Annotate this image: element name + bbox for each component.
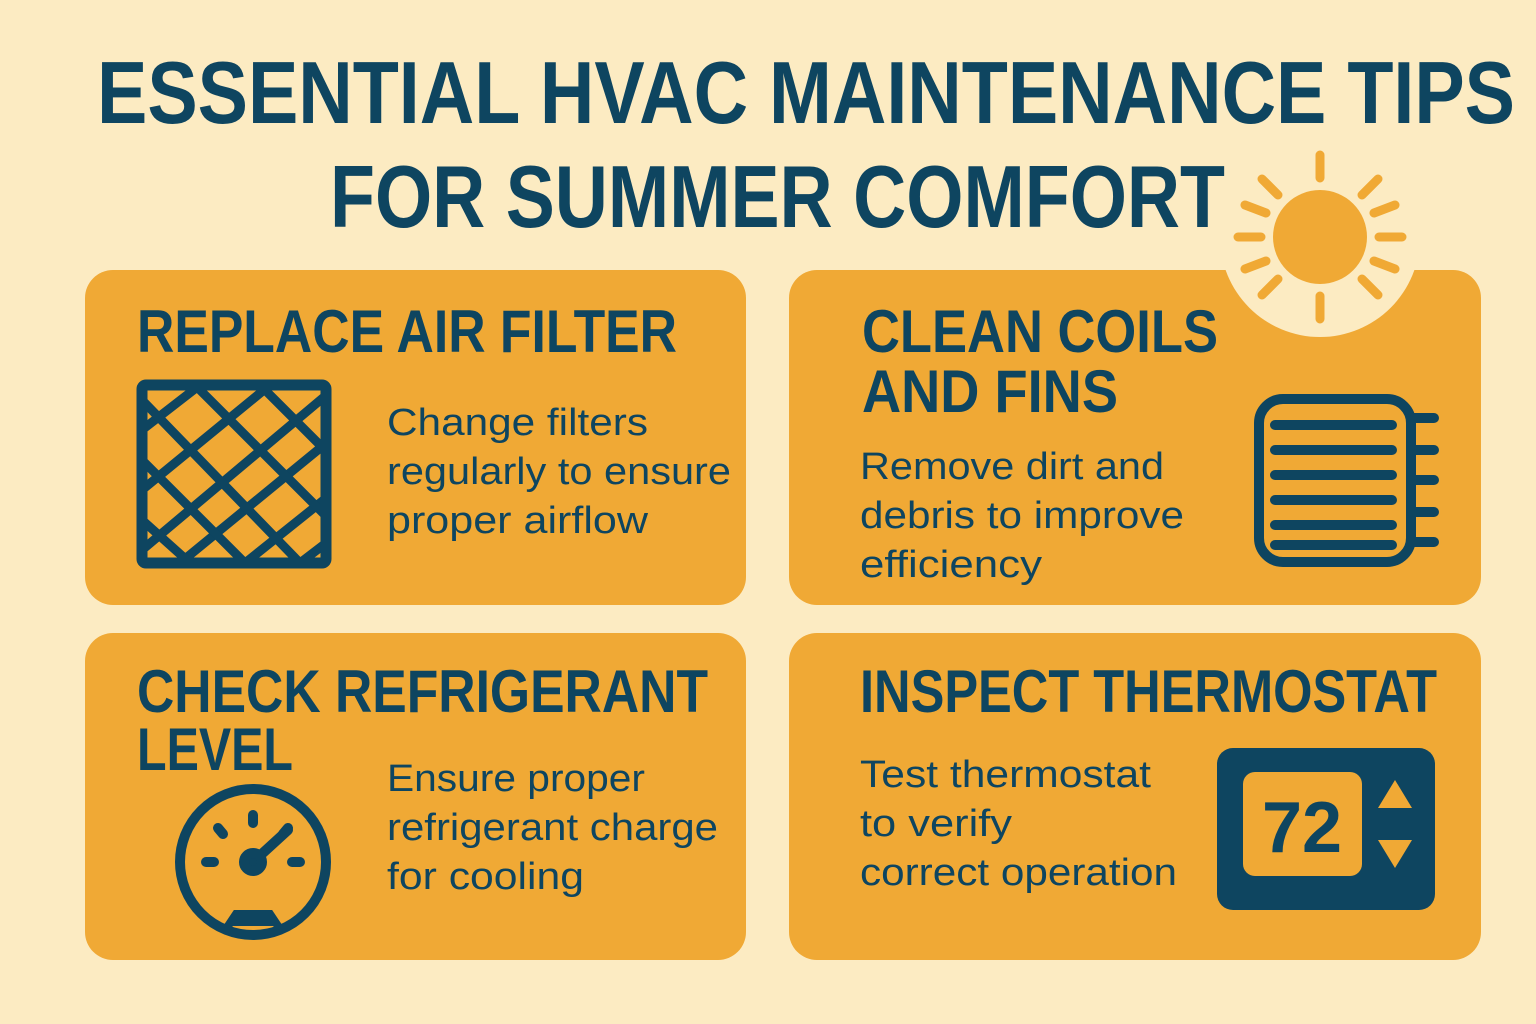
text: filter body: regularly to ensure — [387, 451, 731, 493]
title: FOR SUMMER COMFORT — [330, 147, 1225, 246]
text: refrigerant body: Ensure proper — [387, 758, 645, 800]
heading: clean coils — [862, 298, 1218, 425]
text: refrigerant body — [387, 758, 718, 898]
icon: thermostat: 72 — [1262, 788, 1342, 868]
text: filter body: proper airflow — [387, 500, 649, 542]
text: refrigerant body: refrigerant charge — [387, 807, 718, 849]
text: thermostat body: Test thermostat — [860, 754, 1151, 796]
icon: air filter — [142, 385, 330, 563]
text: coils body: debris to improve — [860, 495, 1184, 537]
heading: clean coils: AND FINS — [862, 358, 1118, 425]
icon: coil — [1259, 399, 1434, 562]
text: coils body: Remove dirt and — [860, 446, 1164, 488]
text: refrigerant body: for cooling — [387, 856, 584, 898]
text: thermostat body: to verify — [860, 803, 1012, 845]
text: coils body — [860, 446, 1184, 586]
heading: check refrigerant: CHECK REFRIGERANT — [137, 658, 708, 725]
heading: check refrigerant — [137, 658, 708, 783]
icon: thermostat — [1217, 748, 1435, 910]
heading: inspect thermostat: INSPECT THERMOSTAT — [860, 658, 1437, 725]
text: filter body: Change filters — [387, 402, 648, 444]
panel: replace air filter — [85, 270, 746, 605]
panel: check refrigerant — [85, 633, 746, 960]
heading: check refrigerant: LEVEL — [137, 716, 293, 783]
icon: sun — [1220, 137, 1420, 337]
panel: clean coils and fins — [789, 270, 1481, 605]
text: coils body: efficiency — [860, 544, 1042, 586]
text: filter body — [387, 402, 731, 542]
text: thermostat body — [860, 754, 1177, 894]
heading: clean coils: CLEAN COILS — [862, 298, 1218, 365]
heading: replace air filter: REPLACE AIR FILTER — [137, 298, 677, 365]
panel: inspect thermostat — [789, 633, 1481, 960]
title — [97, 43, 1515, 246]
icon: gauge — [180, 789, 326, 935]
text: thermostat body: correct operation — [860, 852, 1177, 894]
